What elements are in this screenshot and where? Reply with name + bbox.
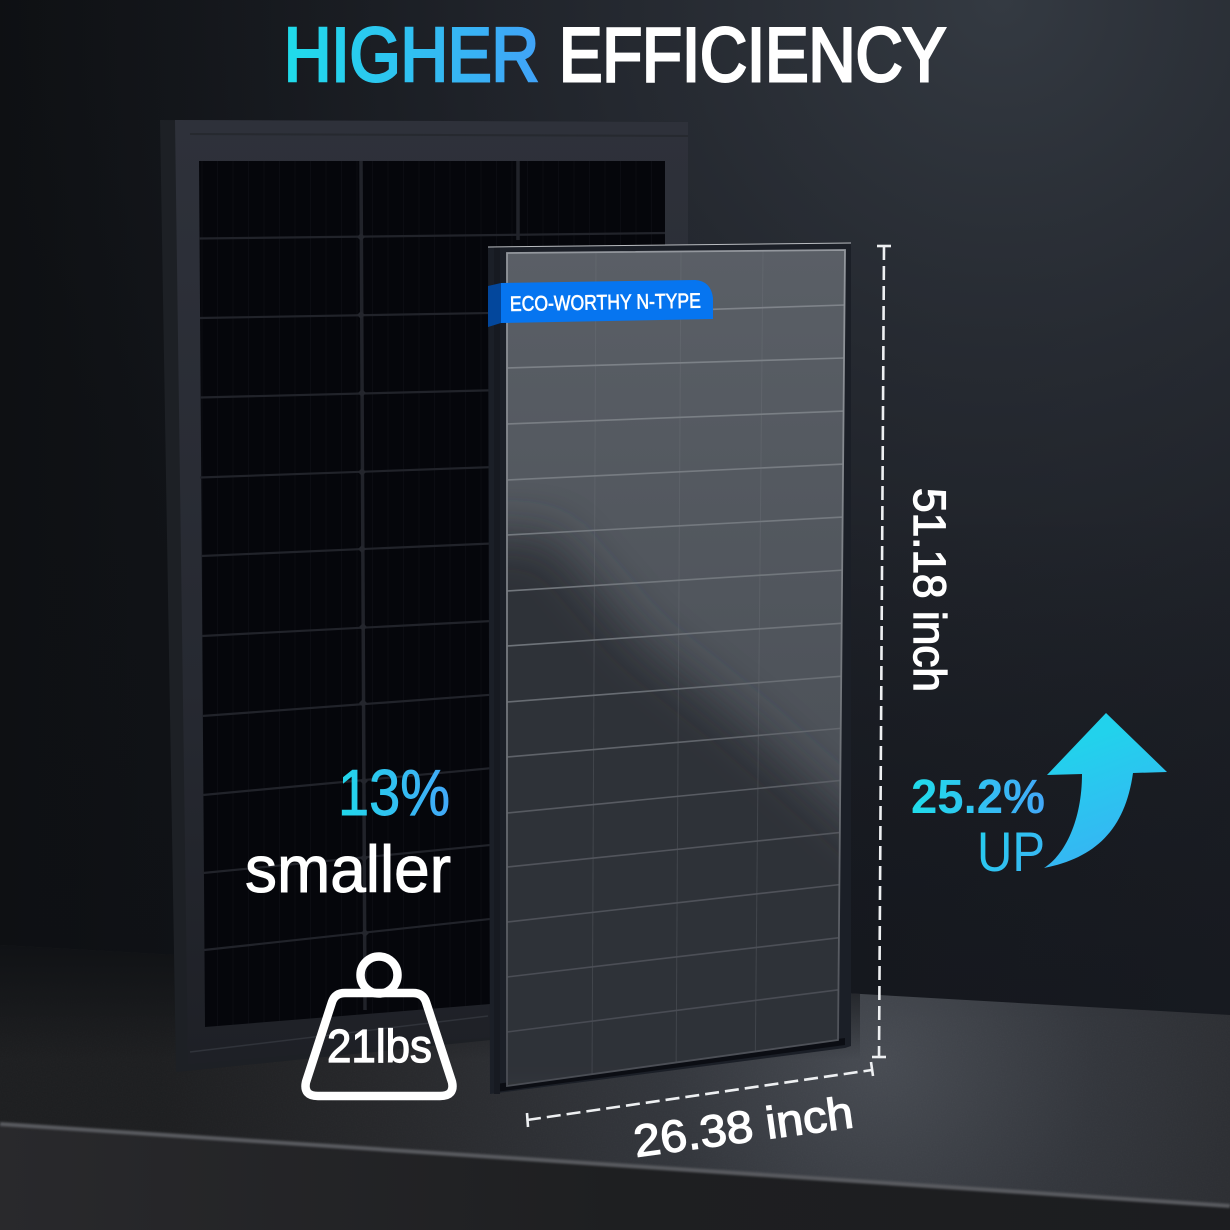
floor	[0, 987, 1230, 1230]
height label: 51.18 inch	[904, 488, 955, 692]
title	[284, 13, 946, 98]
callout: 25.2% UP: UP	[977, 820, 1045, 883]
title: EFFICIENCY	[559, 13, 946, 98]
panel: ECO-WORTHY N-type solar panel	[488, 242, 851, 1094]
callout: 13% smaller	[245, 756, 451, 906]
height dimension line	[872, 246, 891, 1057]
title: HIGHER	[284, 13, 539, 98]
width label: 26.38 inch	[630, 1086, 856, 1167]
callout: 25.2% UP: 25.2%	[911, 771, 1045, 824]
label: ECO-WORTHY N-TYPE tag	[488, 280, 713, 327]
callout: 13% smaller: 13%	[338, 756, 450, 829]
label: ECO-WORTHY N-TYPE tag: ECO-WORTHY N-TYPE	[510, 290, 701, 316]
width dimension line	[527, 1062, 873, 1127]
arrow: upward growth	[1044, 713, 1167, 868]
callout: 13% smaller: smaller	[245, 832, 451, 906]
solar glass surface	[508, 251, 844, 1085]
icon: weight 21lbs	[306, 956, 452, 1096]
panel: standard solar panel behind	[160, 120, 688, 1072]
icon: weight 21lbs: 21lbs	[327, 1020, 432, 1072]
callout: 25.2% UP	[911, 771, 1045, 883]
